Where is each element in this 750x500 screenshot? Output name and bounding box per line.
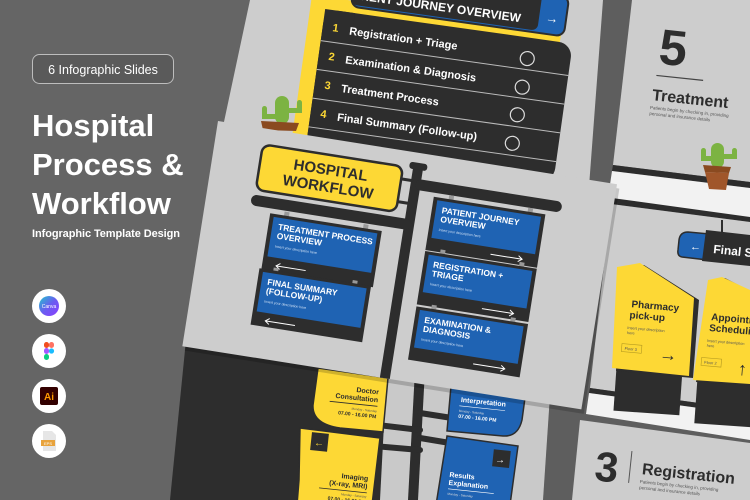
slide: treatment step 5: Treatment <box>651 87 730 112</box>
title <box>32 108 184 221</box>
sign: results explanation: Explanation <box>448 480 488 491</box>
slide: treatment step 5: Patients begin by checking in, providing <box>650 105 729 118</box>
slide: registration step 3: Patients begin by checking in, providing <box>640 479 719 492</box>
sign: doctor consultation <box>313 368 388 432</box>
sign: results explanation: Results <box>449 472 475 482</box>
sign: final summary (follow-up): Insert your description here <box>264 299 307 310</box>
pole <box>370 161 428 380</box>
sign: pharmacy pick-up: Pharmacy <box>631 299 680 314</box>
sign: registration + triage: TRIAGE <box>431 268 465 283</box>
sign: treatment process overview: TREATMENT PROCESS <box>277 222 374 247</box>
title: Process & <box>32 147 184 182</box>
sign: results explanation: → <box>495 455 505 466</box>
sign: doctor consultation: 07.00 - 16.00 PM <box>338 410 377 420</box>
badge: 6 infographic slides: 6 Infographic Slides <box>48 63 158 77</box>
subtitle: Infographic Template Design <box>32 228 180 240</box>
sign: appointment scheduling: here <box>707 344 714 348</box>
icon: canva: Canva <box>42 304 56 310</box>
slide: final summary signage <box>586 198 750 440</box>
sign: results explanation <box>436 436 518 500</box>
icon: canva <box>32 289 66 323</box>
sign: doctor consultation: Monday - Saturday <box>351 407 378 413</box>
sign: final summary (follow-up): (FOLLOW-UP) <box>265 286 323 304</box>
heading: hospital workflow sign: WORKFLOW <box>281 172 375 203</box>
sign: doctor interpretation: Interpretation <box>461 397 506 409</box>
icon: illustrator: Ai <box>44 392 54 403</box>
sign: imaging <box>297 428 380 500</box>
list card: Final Summary (Follow-up) <box>336 112 478 143</box>
icon: eps file: EPS <box>44 441 52 446</box>
sign: examination & diagnosis: EXAMINATION & <box>424 315 492 335</box>
sign: doctor interpretation: Monday - Saturday <box>459 409 485 415</box>
sign: imaging: ← <box>314 438 324 449</box>
sign: pharmacy pick-up: → <box>658 344 678 365</box>
heading: hospital workflow sign: HOSPITAL <box>292 156 369 185</box>
sign: patient journey overview: Insert your description here <box>438 228 481 238</box>
sign: doctor interpretation <box>447 375 527 436</box>
slide: registration step 3: personal and insurance details <box>639 485 701 496</box>
header: overview tab <box>342 0 569 36</box>
icon: cactus right <box>701 143 737 190</box>
hanging sign: final summary <box>678 230 750 266</box>
sign: imaging: Imaging <box>341 473 369 483</box>
title: Workflow <box>32 186 172 221</box>
sign: pharmacy pick-up: pick-up <box>629 310 665 324</box>
sign: registration + triage: REGISTRATION + <box>432 259 504 280</box>
pole <box>408 370 425 500</box>
slide: treatment step 5: 5 <box>656 19 690 77</box>
icon: eps file <box>32 424 66 458</box>
header: overview tab: → <box>545 10 560 26</box>
sign: pharmacy pick-up: Insert your description <box>627 326 665 333</box>
sign: treatment process overview: OVERVIEW <box>276 231 324 248</box>
list card: Registration + Triage <box>348 26 458 53</box>
list card <box>306 9 573 182</box>
sign: doctor consultation: Consultation <box>335 393 378 404</box>
sign: appointment scheduling: Floor 2 <box>704 360 718 366</box>
sign: patient journey overview: OVERVIEW <box>440 214 487 231</box>
slide: main hospital workflow <box>182 121 620 414</box>
badge: 6 infographic slides <box>32 54 174 84</box>
list card: 4 <box>320 108 328 121</box>
sign: patient journey overview <box>425 193 546 268</box>
slide: bottom hanging signs <box>170 300 566 500</box>
icon: cactus left <box>261 96 302 131</box>
slide: top patient journey list <box>218 0 603 200</box>
sign: appointment scheduling: ↑ <box>737 359 748 379</box>
sign: treatment process overview: Insert your description here <box>275 244 317 255</box>
sign: examination & diagnosis <box>408 302 529 377</box>
slide: treatment step 5: personal and insurance details <box>649 111 711 122</box>
sign: registration + triage <box>417 247 537 322</box>
slide: registration step 3: 3 <box>593 442 621 492</box>
sign: appointment scheduling <box>693 277 750 427</box>
sign: appointment scheduling: Insert your description <box>707 339 745 346</box>
sign: imaging: Monday - Saturday <box>341 492 367 499</box>
list card: 3 <box>324 80 331 92</box>
sign: imaging: (X-ray, MRI) <box>329 480 368 491</box>
slide: registration step 3 <box>572 420 750 500</box>
sign: examination & diagnosis: DIAGNOSIS <box>422 324 471 341</box>
sign: final summary (follow-up): FINAL SUMMARY <box>267 277 339 298</box>
list card: 1 <box>332 22 339 35</box>
list card: Examination & Diagnosis <box>344 54 477 85</box>
sign: patient journey overview: PATIENT JOURNEY <box>441 205 521 227</box>
sign: final summary (follow-up) <box>251 265 372 342</box>
heading: hospital workflow sign <box>256 144 403 212</box>
icon: illustrator <box>32 379 66 413</box>
sign: results explanation: Monday - Saturday <box>447 492 473 498</box>
sign: treatment process overview <box>261 209 382 287</box>
list card: 2 <box>328 51 335 64</box>
sign: pharmacy pick-up: here <box>627 331 635 336</box>
hanging sign: final summary: ← <box>690 241 701 253</box>
sign: pharmacy pick-up <box>612 263 699 415</box>
list card: Treatment Process <box>340 83 440 109</box>
sign: examination & diagnosis: Insert your description here <box>421 338 464 348</box>
sign: doctor interpretation: 07.00 - 16.00 PM <box>458 414 497 424</box>
title: Hospital <box>32 108 154 143</box>
slide: treatment step 5 <box>608 0 750 218</box>
sign: pharmacy pick-up: Floor 3 <box>624 346 638 352</box>
sign: registration + triage: Insert your description here <box>430 282 472 293</box>
slide: registration step 3: Registration <box>641 461 736 488</box>
icon: figma <box>32 334 66 368</box>
sign: doctor consultation: Doctor <box>356 387 379 396</box>
background: right slide gaps <box>540 0 750 500</box>
